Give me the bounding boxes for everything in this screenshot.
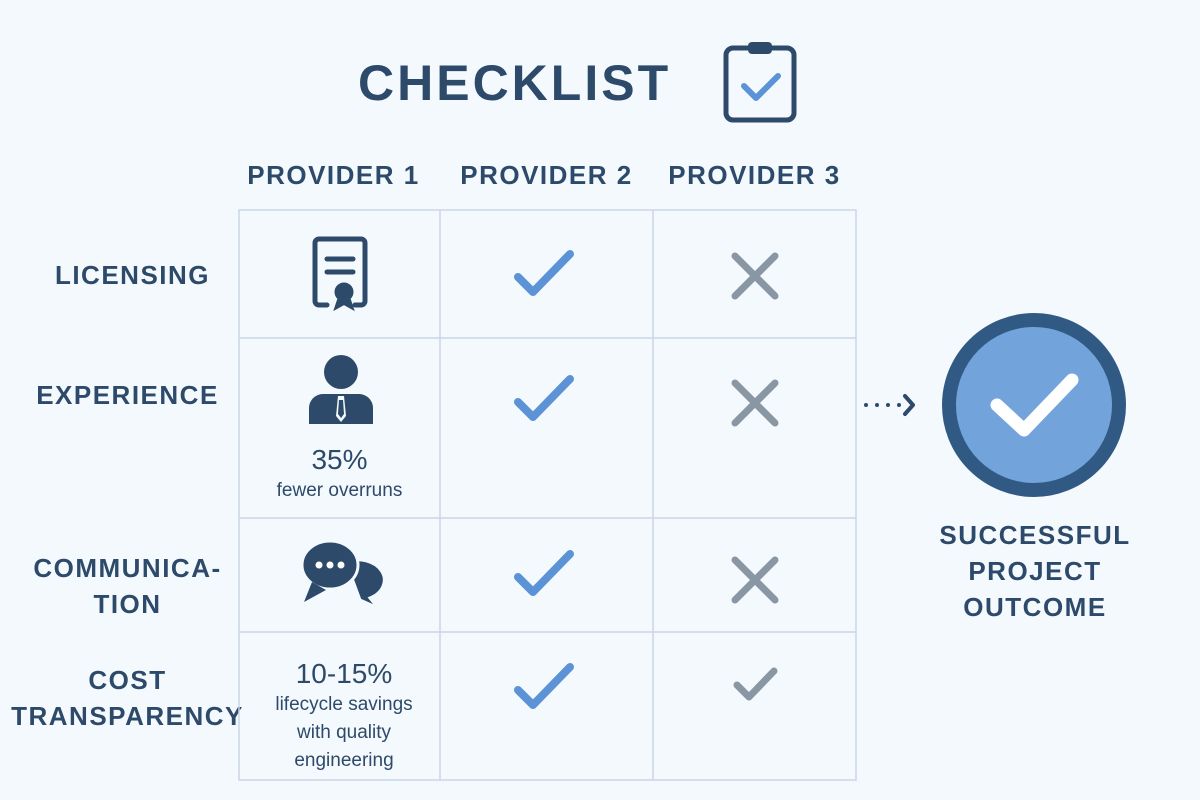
- icon: clipboard: [724, 42, 796, 122]
- row labels: [11, 260, 244, 731]
- row labels: LICENSING: [55, 260, 210, 290]
- stat: 10-15%: 10-15%: [296, 658, 392, 689]
- column headers: PROVIDER 3: [668, 160, 841, 190]
- column headers: PROVIDER 1: [247, 160, 420, 190]
- success circle: [949, 320, 1119, 490]
- icon: certificate: [315, 239, 365, 309]
- stat: 35%: [276, 444, 402, 501]
- arrow: [864, 396, 913, 414]
- outcome label: [939, 520, 1131, 622]
- column headers: [247, 160, 841, 190]
- outcome label: SUCCESSFUL: [939, 520, 1131, 550]
- title: CHECKLIST: [358, 55, 671, 111]
- row labels: TRANSPARENCY: [11, 701, 244, 731]
- stat: 35%: fewer overruns: [277, 480, 402, 501]
- stat: 35%: 35%: [311, 444, 368, 475]
- stat: 10-15%: with quality: [297, 722, 391, 743]
- row labels: TION: [93, 589, 162, 619]
- crosses provider 3: [735, 256, 775, 600]
- row labels: COST: [88, 665, 167, 695]
- stat: 10-15%: lifecycle savings: [275, 694, 413, 715]
- column headers: PROVIDER 2: [460, 160, 633, 190]
- icon: person: [309, 355, 373, 424]
- row labels: EXPERIENCE: [36, 380, 219, 410]
- stat: 10-15%: engineering: [294, 750, 394, 771]
- stat: 10-15%: [275, 658, 413, 771]
- row labels: COMMUNICA-: [33, 553, 222, 583]
- icon: chat bubbles: [302, 541, 384, 608]
- small check provider 3: [737, 671, 774, 697]
- outcome label: PROJECT: [968, 556, 1102, 586]
- checks provider 2: [518, 254, 570, 705]
- outcome label: OUTCOME: [963, 592, 1107, 622]
